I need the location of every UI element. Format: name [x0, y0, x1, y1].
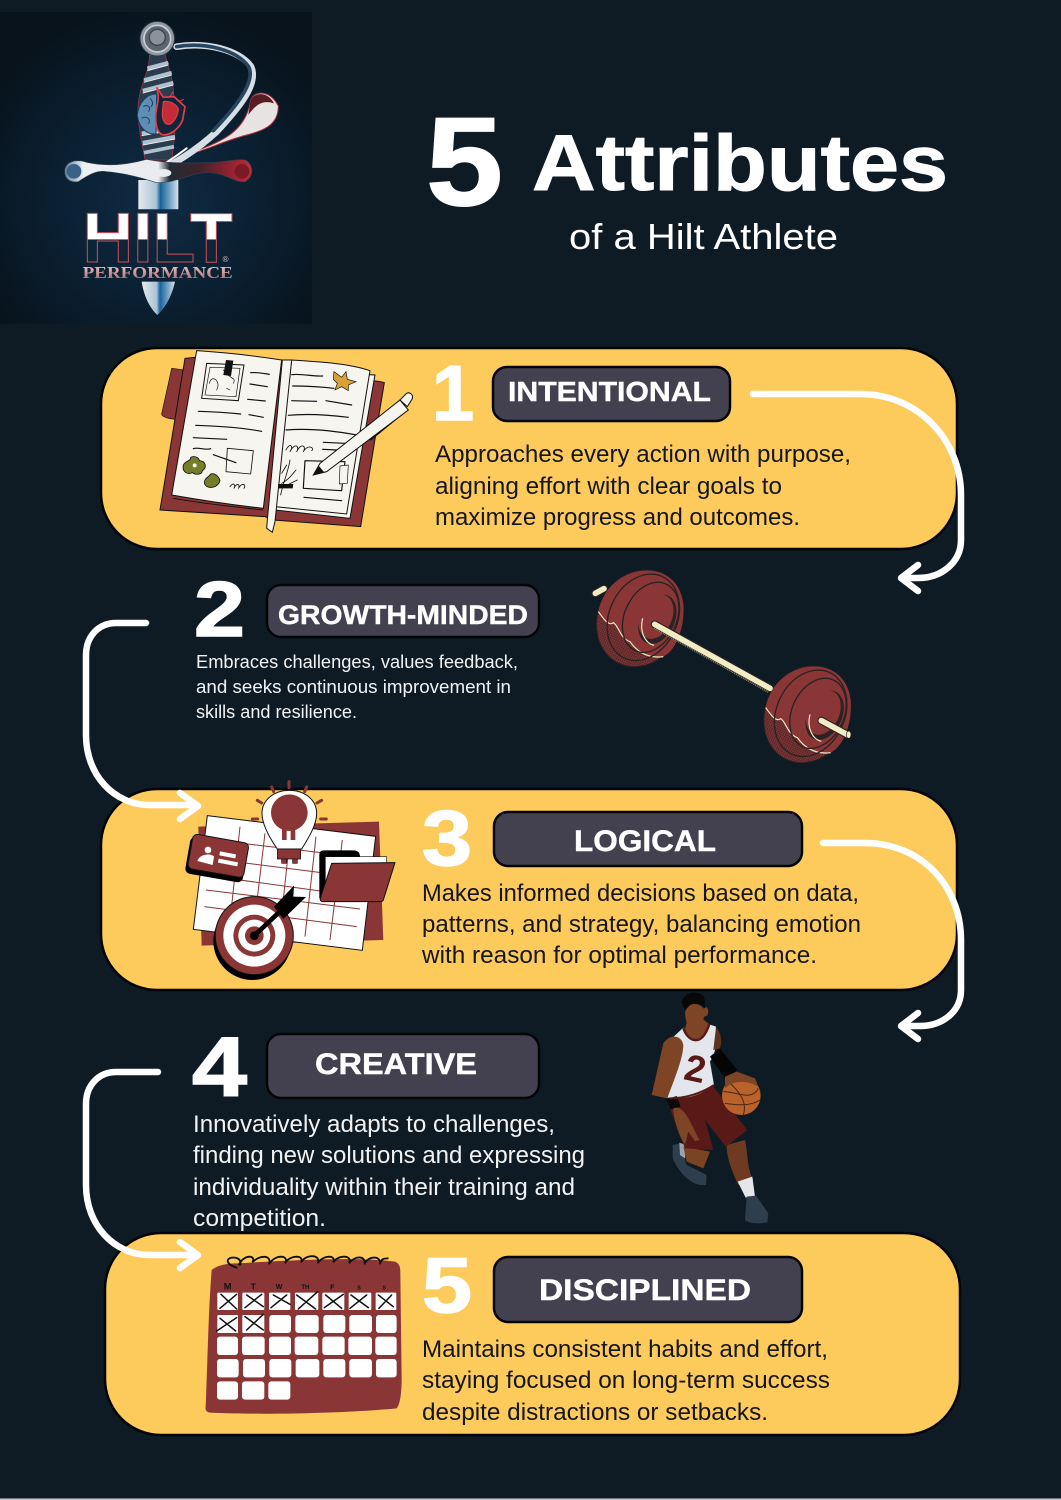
section: creative — [192, 993, 768, 1232]
description text: Maintains consistent habits and effort, — [422, 1336, 828, 1363]
description text — [196, 652, 518, 722]
description text: skills and resilience. — [196, 702, 357, 722]
left plates — [581, 556, 699, 681]
jersey number: 2 — [681, 1046, 710, 1091]
description text: competition. — [193, 1205, 326, 1232]
description text: Innovatively adapts to challenges, — [193, 1111, 555, 1138]
logo: HILT wordmark: HILT — [83, 198, 233, 277]
logo: registered mark: ® — [223, 255, 229, 264]
label pill: growth-minded — [267, 585, 539, 637]
logo: pommel — [140, 21, 175, 56]
label pill: disciplined — [494, 1257, 802, 1322]
icon: ID card — [185, 834, 249, 883]
label pill: intentional — [493, 367, 730, 421]
bar — [655, 624, 770, 688]
logo: Hilt Performance — [0, 12, 312, 324]
description text: Embraces challenges, values feedback, — [196, 652, 518, 672]
calendar binding — [228, 1256, 388, 1268]
number 5: 5 — [422, 1241, 472, 1329]
panel: logical — [101, 782, 957, 990]
icon: lightbulb — [252, 782, 326, 863]
arrow: step 4 to 5 — [86, 1072, 198, 1268]
label pill: logical — [494, 812, 802, 866]
weekday letters: S — [383, 1285, 387, 1291]
weekday letters — [224, 1282, 387, 1292]
description text: individuality within their training and — [193, 1174, 575, 1201]
label pill: creative: CREATIVE — [315, 1048, 477, 1081]
icon: planning board with lightbulb and target — [185, 782, 395, 980]
icon: calendar — [206, 1256, 402, 1414]
panel: intentional — [101, 348, 957, 549]
icon: barbell — [581, 556, 866, 777]
jersey — [667, 1024, 716, 1098]
label pill: disciplined: DISCIPLINED — [539, 1274, 751, 1307]
logo: crossguard — [65, 159, 252, 183]
description text: Approaches every action with purpose, — [435, 441, 851, 468]
logo: red loop — [197, 93, 278, 152]
number 4: 4 — [192, 1020, 247, 1114]
label pill: creative — [267, 1034, 539, 1098]
description text: and seeks continuous improvement in — [196, 677, 511, 697]
arrow: step 3 to 4 — [823, 843, 961, 1039]
label pill: intentional: INTENTIONAL — [508, 376, 711, 407]
weekday letters: F — [330, 1284, 335, 1291]
description text — [193, 1111, 585, 1232]
description text — [435, 441, 851, 531]
icon: folder — [319, 850, 395, 902]
number 3: 3 — [422, 794, 472, 882]
weekday letters: S — [357, 1285, 361, 1291]
weekday letters: W — [276, 1284, 283, 1291]
description text: despite distractions or setbacks. — [422, 1399, 768, 1426]
icon: open notebook — [160, 351, 413, 532]
label pill: logical: LOGICAL — [574, 825, 716, 858]
subtitle: of a Hilt Athlete — [569, 216, 838, 257]
logo: brain — [137, 94, 157, 134]
logo: PERFORMANCE wordmark: PERFORMANCE — [83, 263, 233, 282]
arrow: step 2 to 3 — [86, 623, 198, 819]
description text: finding new solutions and expressing — [193, 1142, 585, 1169]
description text: aligning effort with clear goals to — [435, 473, 782, 500]
weekday letters: T — [251, 1282, 257, 1292]
icon: basketball player — [652, 993, 768, 1223]
weekday letters: TH — [301, 1285, 309, 1291]
arrow: step 1 to 2 — [753, 394, 961, 591]
description text: maximize progress and outcomes. — [435, 504, 800, 531]
right plates — [748, 652, 866, 777]
icon: target — [213, 886, 306, 980]
weekday letters: M — [224, 1282, 232, 1292]
panel background — [105, 1233, 960, 1435]
logo: blade top — [138, 180, 178, 209]
number 2: 2 — [194, 565, 245, 653]
description text: Makes informed decisions based on data, — [422, 880, 859, 907]
panel background — [101, 348, 957, 549]
panel background — [101, 789, 957, 990]
description text: staying focused on long-term success — [422, 1367, 830, 1394]
description text — [422, 1336, 830, 1426]
description text: with reason for optimal performance. — [421, 942, 817, 969]
logo: grip — [138, 55, 175, 160]
logo: heart — [156, 87, 185, 135]
panel: disciplined — [105, 1233, 960, 1435]
description text: patterns, and strategy, balancing emotion — [422, 911, 861, 938]
logo: knuckle guard sweep — [152, 45, 253, 174]
description text — [421, 880, 861, 969]
logo: blade tip — [142, 282, 175, 315]
title numeral: 5 — [426, 91, 503, 232]
section: growth-minded — [194, 556, 866, 777]
title word: Attributes — [532, 118, 948, 207]
title — [426, 91, 948, 257]
label pill: growth-minded: GROWTH-MINDED — [278, 600, 528, 630]
number 1: 1 — [432, 349, 474, 437]
